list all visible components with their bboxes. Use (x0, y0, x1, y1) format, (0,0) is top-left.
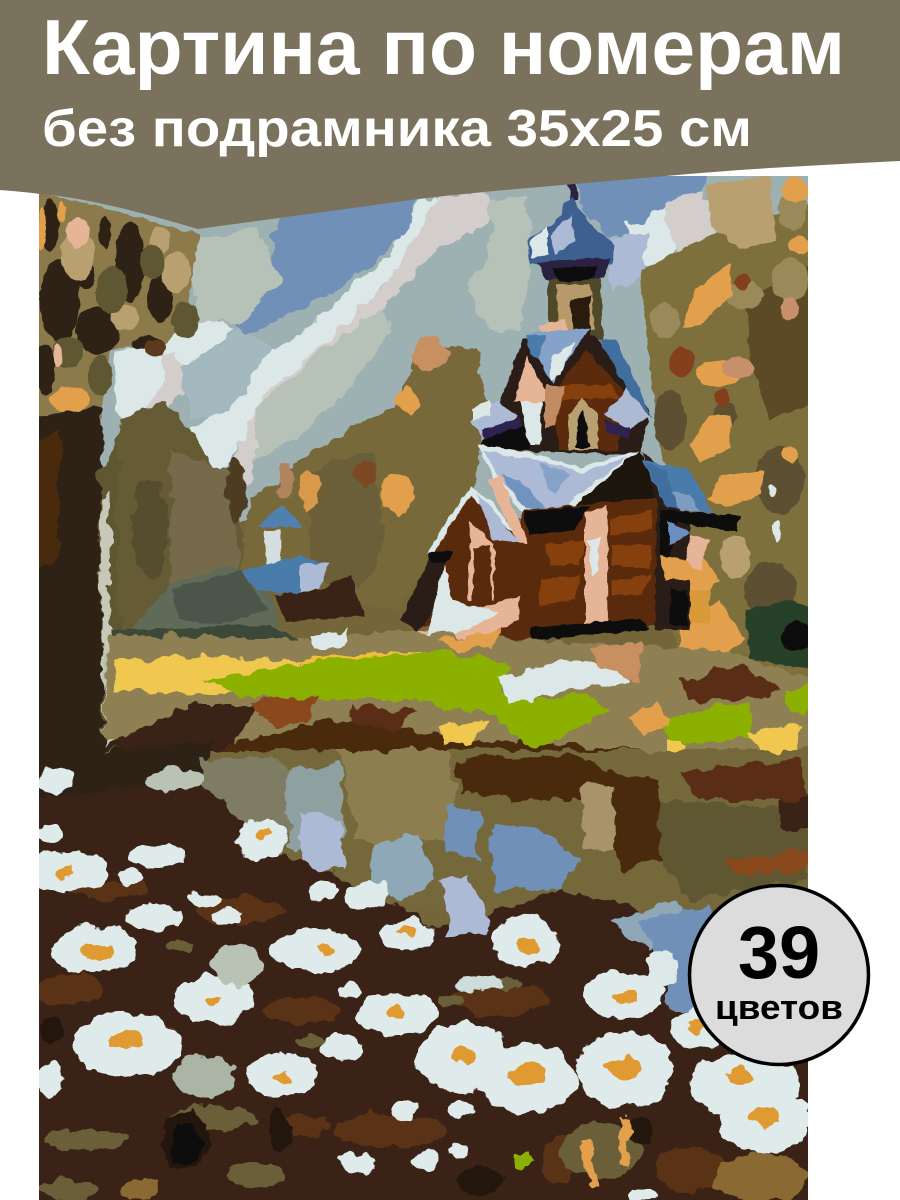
meadow strip (100, 628, 808, 756)
badge label: цветов (715, 989, 843, 1027)
daisies (23, 768, 809, 1200)
header banner (0, 0, 900, 229)
left tree mass and trunk (39, 194, 200, 420)
drum and upper dome (528, 180, 615, 345)
painting: church by the pond with daisies (23, 170, 820, 1200)
subtitle: без подрамника 35х25 см (42, 100, 752, 158)
foreground dark ground (30, 780, 820, 1200)
right side roof and wall (642, 450, 740, 630)
right autumn trees (640, 175, 820, 680)
upper tier with gable roofs (470, 328, 652, 455)
small distant chapel and bush (110, 505, 365, 650)
title: Картина по номерам (42, 3, 845, 91)
side porch (400, 475, 528, 650)
pond reflections (30, 740, 815, 910)
badge number: 39 (738, 911, 820, 994)
main log wall (490, 497, 657, 645)
middle distant trees (226, 337, 490, 610)
sky and clouds (30, 170, 820, 520)
color count badge (690, 886, 868, 1064)
main church (400, 180, 740, 650)
main roof (478, 444, 656, 512)
